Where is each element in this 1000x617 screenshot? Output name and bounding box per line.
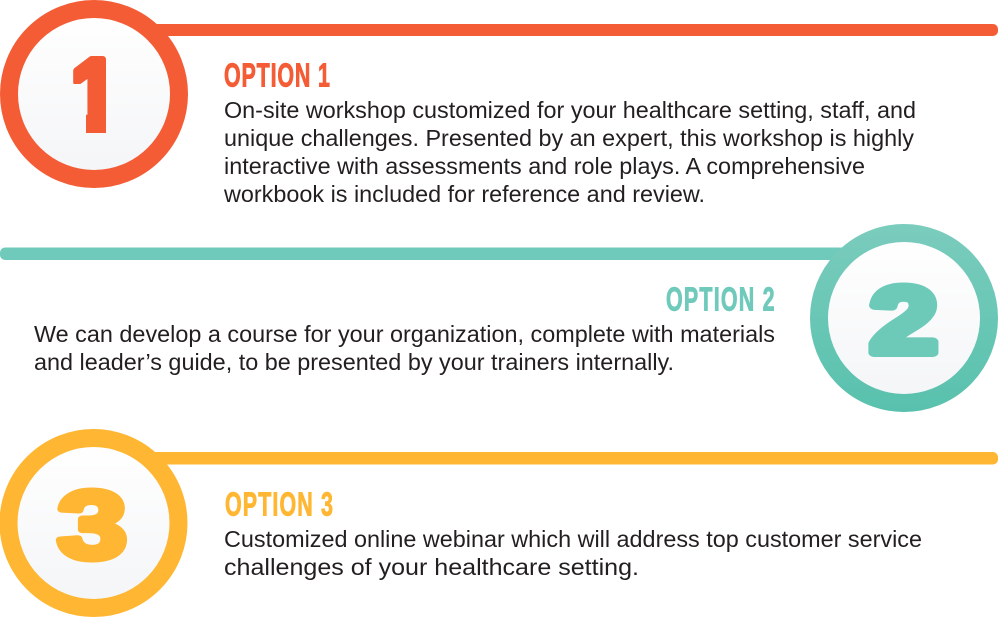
- text block: option 2 description: [34, 321, 775, 375]
- text block: option 1 description: [223, 97, 916, 207]
- panel: option 1: [9, 9, 998, 207]
- badge: number 1: [9, 9, 179, 179]
- text block: option 1 description: unique challenges. Presented by an expert, this workshop is highly: [224, 125, 915, 151]
- heading: option 2: OPTION 2: [666, 281, 775, 318]
- badge: number 2: [819, 233, 989, 403]
- text block: option 2 description: We can develop a course for your organization, complete with materials: [34, 321, 775, 347]
- badge: number 1: 1: [71, 39, 119, 151]
- text block: option 1 description: interactive with assessments and role plays. A comprehensive: [224, 153, 865, 179]
- connector line 3: [150, 452, 998, 464]
- text block: option 1 description: workbook is included for reference and review.: [223, 181, 705, 207]
- connector line 1: [150, 24, 998, 36]
- panel: option 2: [0, 233, 989, 403]
- badge: number 3: [8, 438, 178, 608]
- heading: option 1: OPTION 1: [224, 57, 330, 94]
- heading: option 3: OPTION 3: [225, 486, 333, 523]
- panel: option 3: [8, 438, 998, 608]
- connector line 2: [0, 248, 850, 260]
- text block: option 1 description: On-site workshop customized for your healthcare setting, staff, and: [224, 97, 916, 123]
- text block: option 3 description: Customized online webinar which will address top customer service: [224, 526, 922, 552]
- text block: option 3 description: challenges of your healthcare setting.: [224, 554, 639, 580]
- badge: number 3: 3: [58, 472, 127, 579]
- text block: option 3 description: [224, 526, 922, 580]
- badge: number 2: 2: [870, 268, 938, 372]
- text block: option 2 description: and leader’s guide, to be presented by your trainers internally.: [34, 349, 674, 375]
